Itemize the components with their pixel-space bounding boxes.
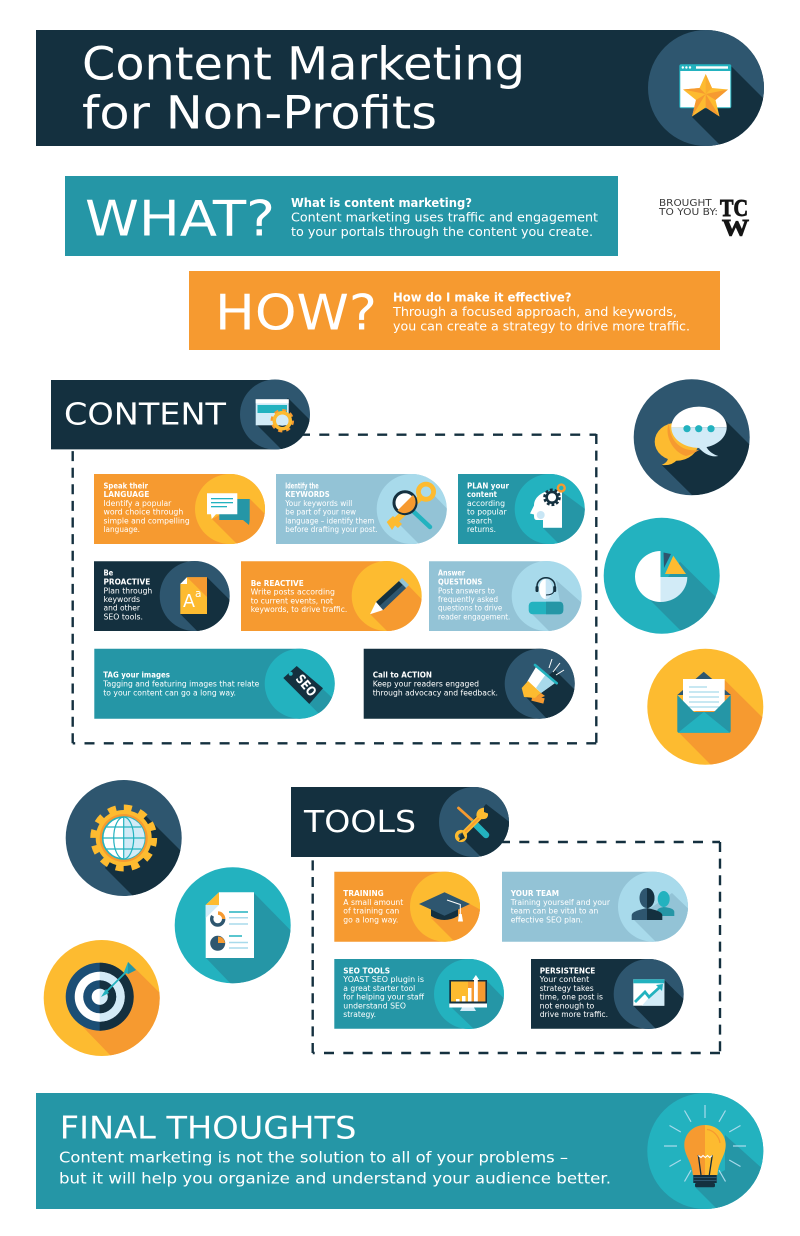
text: be proactive: Be bbox=[104, 569, 113, 578]
text: tag your images: Tagging and featuring images that relate bbox=[102, 680, 260, 689]
text: be reactive: keywords, to drive traffic. bbox=[251, 605, 347, 614]
credit: brought to you by TCW: W bbox=[722, 216, 749, 240]
text: answer questions bbox=[438, 569, 510, 621]
text: final thoughts body: Content marketing is not the solution to all of your problems – bbox=[59, 1149, 568, 1167]
text: your team: effective SEO plan. bbox=[511, 915, 583, 924]
panel: how bbox=[189, 271, 720, 350]
text: your team: team can be vital to an bbox=[511, 907, 598, 916]
text: persistence bbox=[539, 966, 608, 1019]
icon: window with gear bbox=[256, 399, 292, 430]
card: identify the keywords bbox=[276, 474, 447, 544]
text: final thoughts body bbox=[59, 1149, 611, 1187]
text: persistence: not enough to bbox=[540, 1001, 595, 1010]
icon: team silhouettes bbox=[632, 888, 674, 920]
text: call to action: through advocacy and feedback. bbox=[373, 688, 498, 697]
text: SEO tools bbox=[342, 966, 425, 1019]
text: SEO tools: SEO TOOLS bbox=[343, 966, 390, 975]
card: be proactive bbox=[94, 561, 230, 631]
text: plan your content: content bbox=[467, 490, 497, 499]
credit: brought to you by TCW bbox=[658, 196, 749, 240]
text: be reactive: Be REACTIVE bbox=[251, 579, 304, 588]
text: your team: YOUR TEAM bbox=[510, 889, 559, 898]
icon: globe gear circle bbox=[66, 780, 190, 896]
text: answer questions: questions to drive bbox=[438, 604, 503, 613]
card: SEO tools bbox=[334, 959, 520, 1030]
dashed frame: content bbox=[73, 434, 596, 743]
text: speak their language: word choice through bbox=[104, 508, 183, 517]
text: call to action: Keep your readers engaged bbox=[373, 680, 479, 689]
text: tag your images: to your content can go a long way. bbox=[103, 688, 236, 697]
icon: document Aa: A bbox=[183, 591, 196, 612]
text: call to action bbox=[373, 671, 498, 697]
text: plan your content: PLAN your bbox=[467, 481, 509, 490]
text: speak their language: Identify a popular bbox=[104, 499, 172, 508]
text: training: go a long way. bbox=[343, 915, 398, 924]
card: tag your images bbox=[94, 648, 335, 719]
icon: SEO tag bbox=[283, 666, 323, 704]
text: be reactive bbox=[251, 579, 347, 614]
text: plan your content: to popular bbox=[467, 508, 508, 517]
card: answer questions bbox=[429, 561, 590, 632]
text: training: A small amount bbox=[343, 898, 403, 907]
text: call to action: Call to ACTION bbox=[373, 671, 432, 680]
text: speak their language: LANGUAGE bbox=[104, 490, 149, 499]
icon: document Aa: a bbox=[195, 588, 201, 600]
text: how do I make it effective: How do I make it effective? bbox=[393, 289, 572, 304]
icon: growth window bbox=[633, 979, 664, 1006]
text: identify the keywords: language – identify them bbox=[285, 516, 374, 525]
text: your team: Training yourself and your bbox=[510, 898, 611, 907]
icon: document Aa bbox=[180, 577, 207, 614]
text: answer questions: frequently asked bbox=[438, 595, 498, 604]
text: plan your content bbox=[467, 481, 509, 534]
text: SEO tools: YOAST SEO plugin is bbox=[342, 975, 424, 984]
card: training bbox=[334, 872, 490, 942]
credit: brought to you by TCW: TC bbox=[720, 196, 748, 222]
heading: title: Content Marketing bbox=[82, 38, 525, 90]
icon: report document circle bbox=[175, 867, 300, 984]
text: persistence: PERSISTENCE bbox=[540, 966, 595, 975]
icon: megaphone bbox=[522, 659, 564, 701]
icon: envelope circle bbox=[647, 649, 770, 765]
text: be proactive: Plan through bbox=[104, 586, 152, 595]
icon: pie chart circle bbox=[604, 518, 725, 634]
heading: TOOLS: TOOLS bbox=[303, 805, 416, 840]
text: plan your content: according bbox=[467, 499, 505, 508]
icon: chat bubbles circle bbox=[634, 379, 760, 495]
text: answer questions: reader engagement. bbox=[438, 612, 510, 621]
text: speak their language bbox=[104, 481, 190, 534]
text: identify the keywords: Your keywords will bbox=[284, 499, 352, 508]
text: answer questions: QUESTIONS bbox=[438, 578, 482, 587]
text: persistence: Your content bbox=[539, 975, 589, 984]
text: final thoughts body: but it will help you organize and understand your audience better. bbox=[59, 1169, 611, 1187]
icon: speech bubbles bbox=[207, 493, 250, 525]
icon: head with gears bbox=[530, 485, 565, 528]
text: SEO tools: a great starter tool bbox=[343, 984, 415, 993]
text: plan your content: search bbox=[467, 516, 492, 525]
card: plan your content bbox=[458, 474, 585, 544]
text: what is content marketing: Content marketing uses traffic and engagement bbox=[291, 210, 598, 225]
text: identify the keywords: before drafting your post. bbox=[285, 525, 378, 534]
text: tag your images: TAG your images bbox=[103, 671, 170, 680]
heading: FINAL THOUGHTS: FINAL THOUGHTS bbox=[60, 1111, 356, 1147]
heading: CONTENT: CONTENT bbox=[64, 397, 227, 432]
text: speak their language: Speak their bbox=[104, 481, 148, 490]
text: SEO tools: strategy. bbox=[343, 1010, 376, 1019]
card: speak their language bbox=[94, 474, 265, 544]
text: what is content marketing: What is content marketing? bbox=[291, 195, 472, 210]
heading: title: for Non-Profits bbox=[82, 86, 437, 140]
text: be proactive: and other bbox=[104, 604, 141, 613]
text: answer questions: Post answers to bbox=[438, 586, 495, 595]
section header: tools bbox=[291, 787, 720, 1053]
text: be proactive: SEO tools. bbox=[104, 612, 143, 621]
icon: pencil bbox=[370, 578, 409, 614]
card: your team bbox=[502, 872, 700, 942]
text: speak their language: simple and compelling bbox=[104, 516, 190, 525]
text: answer questions: Answer bbox=[438, 569, 465, 578]
text: training: TRAINING bbox=[343, 889, 384, 898]
icon: SEO tag: SEO bbox=[292, 672, 319, 700]
panel: what bbox=[65, 176, 618, 256]
credit: brought to you by TCW: BROUGHT bbox=[659, 198, 713, 209]
icon: star in browser window bbox=[679, 64, 731, 116]
text: SEO tools: understand SEO bbox=[343, 1001, 406, 1010]
card: be reactive bbox=[241, 561, 422, 631]
text: identify the keywords bbox=[284, 481, 378, 534]
text: tag your images bbox=[102, 671, 260, 697]
text: be proactive: PROACTIVE bbox=[104, 578, 150, 587]
heading: HOW?: HOW? bbox=[215, 284, 377, 341]
text: be reactive: to current events, not bbox=[251, 596, 333, 605]
panel: final thoughts bbox=[36, 1093, 775, 1209]
text: what is content marketing: to your portals through the content you create. bbox=[291, 224, 593, 239]
text: how do I make it effective bbox=[392, 289, 690, 334]
text: how do I make it effective: Through a focused approach, and keywords, bbox=[392, 304, 677, 319]
text: training bbox=[343, 889, 403, 924]
text: be proactive: keywords bbox=[104, 595, 140, 604]
credit: brought to you by TCW: TO YOU BY: bbox=[658, 207, 718, 218]
section header: content bbox=[51, 380, 310, 450]
heading: WHAT?: WHAT? bbox=[85, 190, 275, 247]
icon: graduation cap bbox=[419, 892, 470, 922]
text: speak their language: language. bbox=[104, 525, 140, 534]
card: persistence bbox=[531, 959, 700, 1029]
title banner bbox=[36, 30, 764, 146]
text: be reactive: Write posts according bbox=[251, 588, 335, 597]
text: plan your content: returns. bbox=[467, 525, 496, 534]
text: identify the keywords: Identify the bbox=[285, 481, 319, 490]
text: persistence: strategy takes bbox=[540, 984, 594, 993]
icon: support agent bbox=[529, 578, 563, 614]
text: persistence: time, one post is bbox=[540, 993, 603, 1002]
icon: monitor with bar chart bbox=[449, 975, 487, 1011]
icon: target circle bbox=[44, 940, 170, 1056]
text: how do I make it effective: you can create a strategy to drive more traffic. bbox=[393, 319, 690, 334]
icon: key and magnifier bbox=[387, 484, 434, 530]
text: persistence: drive more traffic. bbox=[540, 1010, 608, 1019]
text: training: of training can bbox=[343, 907, 399, 916]
icon: light bulb bbox=[664, 1105, 746, 1187]
text: what is content marketing bbox=[291, 195, 598, 239]
text: SEO tools: for helping your staff bbox=[343, 993, 425, 1002]
text: your team bbox=[510, 889, 611, 924]
text: be proactive bbox=[104, 569, 152, 621]
text: identify the keywords: be part of your new bbox=[285, 508, 356, 517]
icon: wrench and screwdriver bbox=[457, 808, 488, 841]
card: call to action bbox=[364, 649, 585, 722]
heading: title bbox=[82, 38, 525, 140]
text: identify the keywords: KEYWORDS bbox=[285, 490, 330, 499]
